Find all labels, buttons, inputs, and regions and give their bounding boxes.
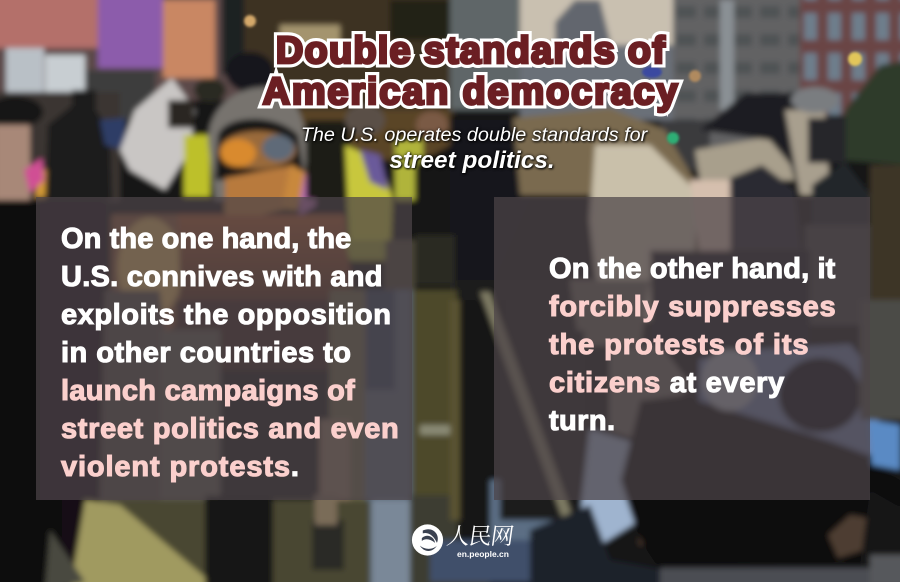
title: Double standards of bbox=[276, 30, 666, 72]
text block: left panel: in other countries to bbox=[61, 337, 351, 369]
title: American democracy bbox=[263, 71, 679, 113]
logo: People's Daily Online bbox=[412, 518, 515, 559]
text block: right panel: turn. bbox=[549, 405, 615, 437]
panel: right dark overlay bbox=[494, 197, 870, 500]
far soldier bbox=[695, 135, 795, 180]
text block: left panel bbox=[60, 223, 399, 483]
bottom left ground bbox=[100, 500, 370, 582]
text block: left panel: U.S. connives with and bbox=[61, 261, 383, 293]
logo url: en.people.cn bbox=[457, 549, 509, 559]
text block: left panel: launch campaigns of bbox=[61, 375, 355, 407]
left panel inner area bbox=[112, 215, 225, 340]
right crowd left half bbox=[345, 145, 392, 250]
icon: logo swirl bbox=[412, 524, 444, 556]
main helmet figure bbox=[208, 87, 308, 200]
subtitle bbox=[301, 124, 650, 174]
text block: left panel: violent protests. bbox=[61, 451, 300, 483]
title bbox=[257, 30, 684, 117]
title: Double standards of bbox=[276, 30, 666, 72]
bottom right bbox=[458, 300, 506, 580]
text block: right panel: On the other hand, it bbox=[549, 253, 835, 285]
text block: left panel: exploits the opposition bbox=[61, 299, 392, 331]
text block: right panel: forcibly suppresses bbox=[549, 291, 836, 323]
subtitle: The U.S. operates double standards for bbox=[301, 124, 647, 146]
left crowd bbox=[0, 96, 43, 128]
text block: right panel bbox=[548, 253, 836, 437]
title: American democracy bbox=[263, 71, 679, 113]
street top right bbox=[450, 0, 525, 110]
panel: left dark overlay bbox=[36, 197, 412, 500]
text block: left panel: On the one hand, the bbox=[61, 223, 351, 255]
text block: right panel: the protests of its bbox=[549, 329, 809, 361]
subtitle: street politics. bbox=[389, 147, 555, 174]
text block: right panel: citizens at every bbox=[549, 367, 785, 399]
foreground soldier bbox=[450, 120, 530, 290]
text block: left panel: street politics and even bbox=[61, 413, 399, 445]
street top left bbox=[0, 0, 240, 100]
logo wordmark: 人民网 bbox=[445, 518, 515, 551]
